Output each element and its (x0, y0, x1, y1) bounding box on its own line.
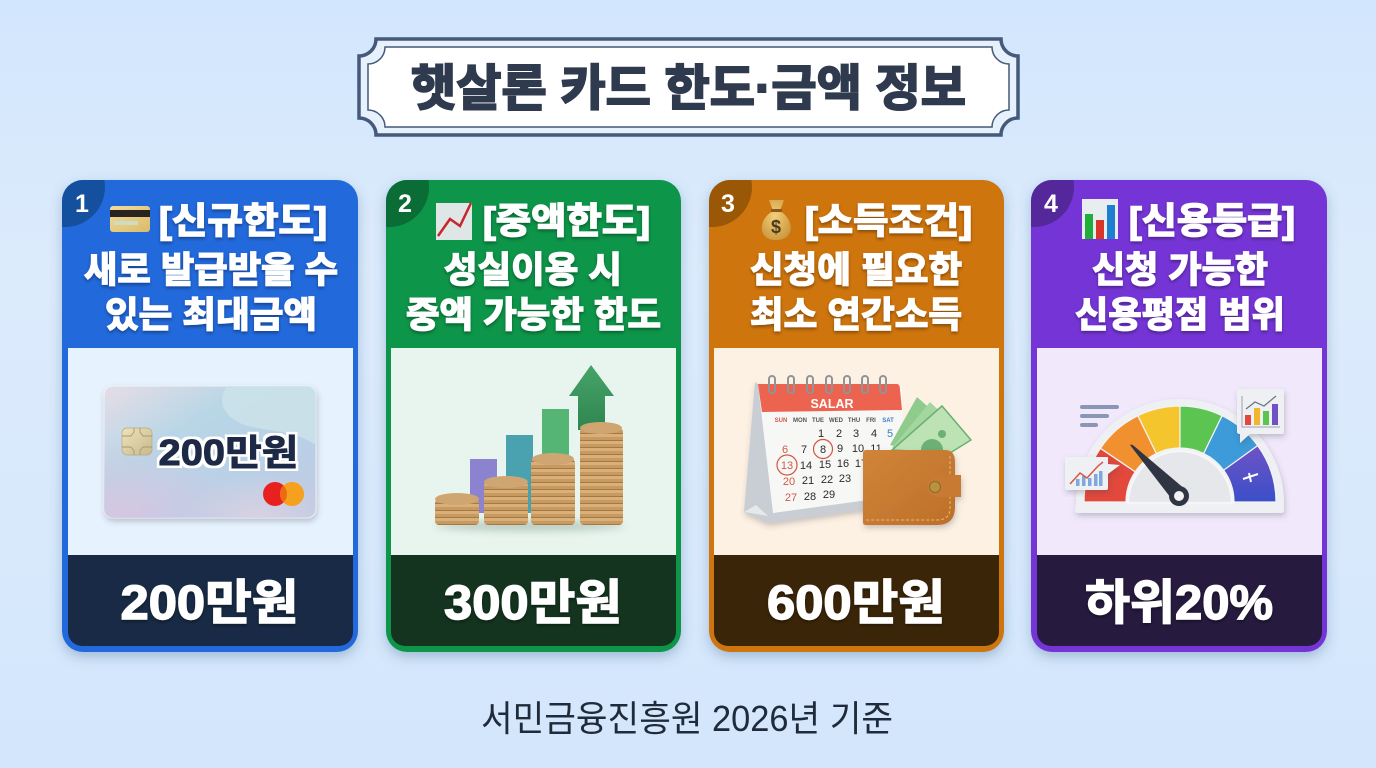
calendar: 8 (820, 444, 826, 456)
heading: [신용등급] (1129, 200, 1295, 241)
icon: bar chart (1082, 199, 1118, 239)
calendar: 23 (839, 473, 851, 485)
calendar: 11 (870, 443, 882, 455)
description: 성실이용 시 (444, 249, 622, 290)
calendar: 3 (853, 428, 859, 440)
panel: credit grade (1024, 178, 1334, 664)
number badge: 4 (1044, 190, 1058, 218)
illustration: credit gauge (1065, 389, 1284, 513)
number badge: 2 (398, 190, 412, 218)
value: 600만원 (767, 577, 945, 630)
calendar: 9 (837, 443, 843, 455)
number badge (386, 180, 429, 227)
card body (1031, 180, 1327, 652)
description (750, 249, 962, 335)
illustration: card with 200만원 (104, 386, 316, 518)
calendar: TUE (812, 418, 824, 424)
calendar: 7 (801, 444, 807, 456)
illustration: calendar and wallet (744, 376, 971, 525)
needle (1130, 445, 1189, 506)
calendar: 17 (855, 458, 867, 470)
illustration panel (391, 348, 676, 555)
heading: [중액한도] (483, 200, 650, 241)
calendar: 16 (837, 458, 849, 470)
mastercard logo (263, 482, 304, 506)
calendar: SALAR (810, 397, 854, 411)
calendar: MON (793, 418, 807, 424)
arrow (569, 365, 614, 430)
heading: [신규한도] (159, 200, 327, 241)
footer source note: 서민금융진흥원 2026년 기준 (481, 698, 893, 739)
value: 300만원 (444, 577, 622, 630)
illustration panel (714, 348, 999, 555)
callout: trend chart (1065, 457, 1120, 490)
calendar (744, 376, 905, 523)
description (1075, 249, 1285, 335)
banknotes (890, 397, 971, 455)
wallet (863, 450, 961, 525)
number badge (1031, 180, 1074, 227)
calendar: 1 (818, 428, 824, 440)
number badge: 3 (721, 190, 735, 218)
description: 중액 가능한 한도 (406, 294, 661, 335)
calendar: WED (829, 418, 844, 424)
number badge: 1 (75, 190, 89, 218)
title plaque (359, 39, 1018, 135)
calendar: 27 (785, 492, 797, 504)
calendar: 21 (802, 475, 814, 487)
gauge hub (1128, 451, 1232, 503)
value band (1037, 555, 1322, 646)
description: 있는 최대금액 (105, 294, 317, 335)
gauge segments (1084, 406, 1276, 502)
panel: income requirement (702, 178, 1011, 664)
coin stacks (435, 422, 623, 525)
description: 새로 발급받을 수 (84, 249, 338, 290)
value band (68, 555, 353, 646)
description: 신용평점 범위 (1075, 294, 1285, 335)
title text: 햇살론 카드 한도·금액 정보 (411, 62, 966, 116)
value: 200만원 (120, 577, 298, 630)
calendar: 28 (804, 491, 816, 503)
calendar: 2 (836, 428, 842, 440)
card body (709, 180, 1004, 652)
calendar: 4 (871, 428, 877, 440)
heading: [소득조건] (805, 200, 972, 241)
calendar: 13 (781, 460, 793, 472)
calendar: 20 (783, 476, 795, 488)
icon: credit card (110, 206, 150, 232)
icon: money bag: $ (771, 217, 781, 237)
number badge (62, 180, 105, 227)
amount on card: 200만원 (158, 432, 298, 473)
panel: new card limit (55, 178, 365, 664)
card body (62, 180, 358, 652)
description (406, 249, 661, 335)
calendar: FRI (866, 418, 876, 424)
bars (470, 409, 569, 513)
illustration panel (1037, 348, 1322, 555)
calendar: 10 (852, 443, 864, 455)
calendar: 14 (800, 460, 812, 472)
plane mark (1243, 473, 1258, 482)
value band (714, 555, 999, 646)
calendar: THU (848, 418, 860, 424)
description: 신청에 필요한 (750, 249, 962, 290)
icon: rising chart (436, 203, 472, 240)
description (84, 249, 338, 335)
illustration panel (68, 348, 353, 555)
calendar: 6 (782, 444, 788, 456)
card body (386, 180, 681, 652)
calendar: SUN (775, 418, 787, 424)
value: 하위20% (1085, 577, 1273, 630)
legend lines (1080, 405, 1119, 427)
calendar: 15 (819, 459, 831, 471)
value band (391, 555, 676, 646)
chip (122, 428, 152, 455)
calendar: 29 (823, 489, 835, 501)
panel: increase limit (379, 178, 688, 664)
number badge (709, 180, 752, 227)
gauge base (1075, 399, 1284, 513)
calendar: SAT (882, 418, 894, 424)
callout: bar chart (1237, 389, 1284, 443)
calendar: 22 (821, 474, 833, 486)
description: 최소 연간소득 (750, 294, 962, 335)
calendar: 5 (887, 428, 893, 440)
description: 신청 가능한 (1092, 249, 1268, 290)
illustration: bars, arrow, coins (435, 365, 625, 531)
icon: money bag (762, 200, 791, 240)
